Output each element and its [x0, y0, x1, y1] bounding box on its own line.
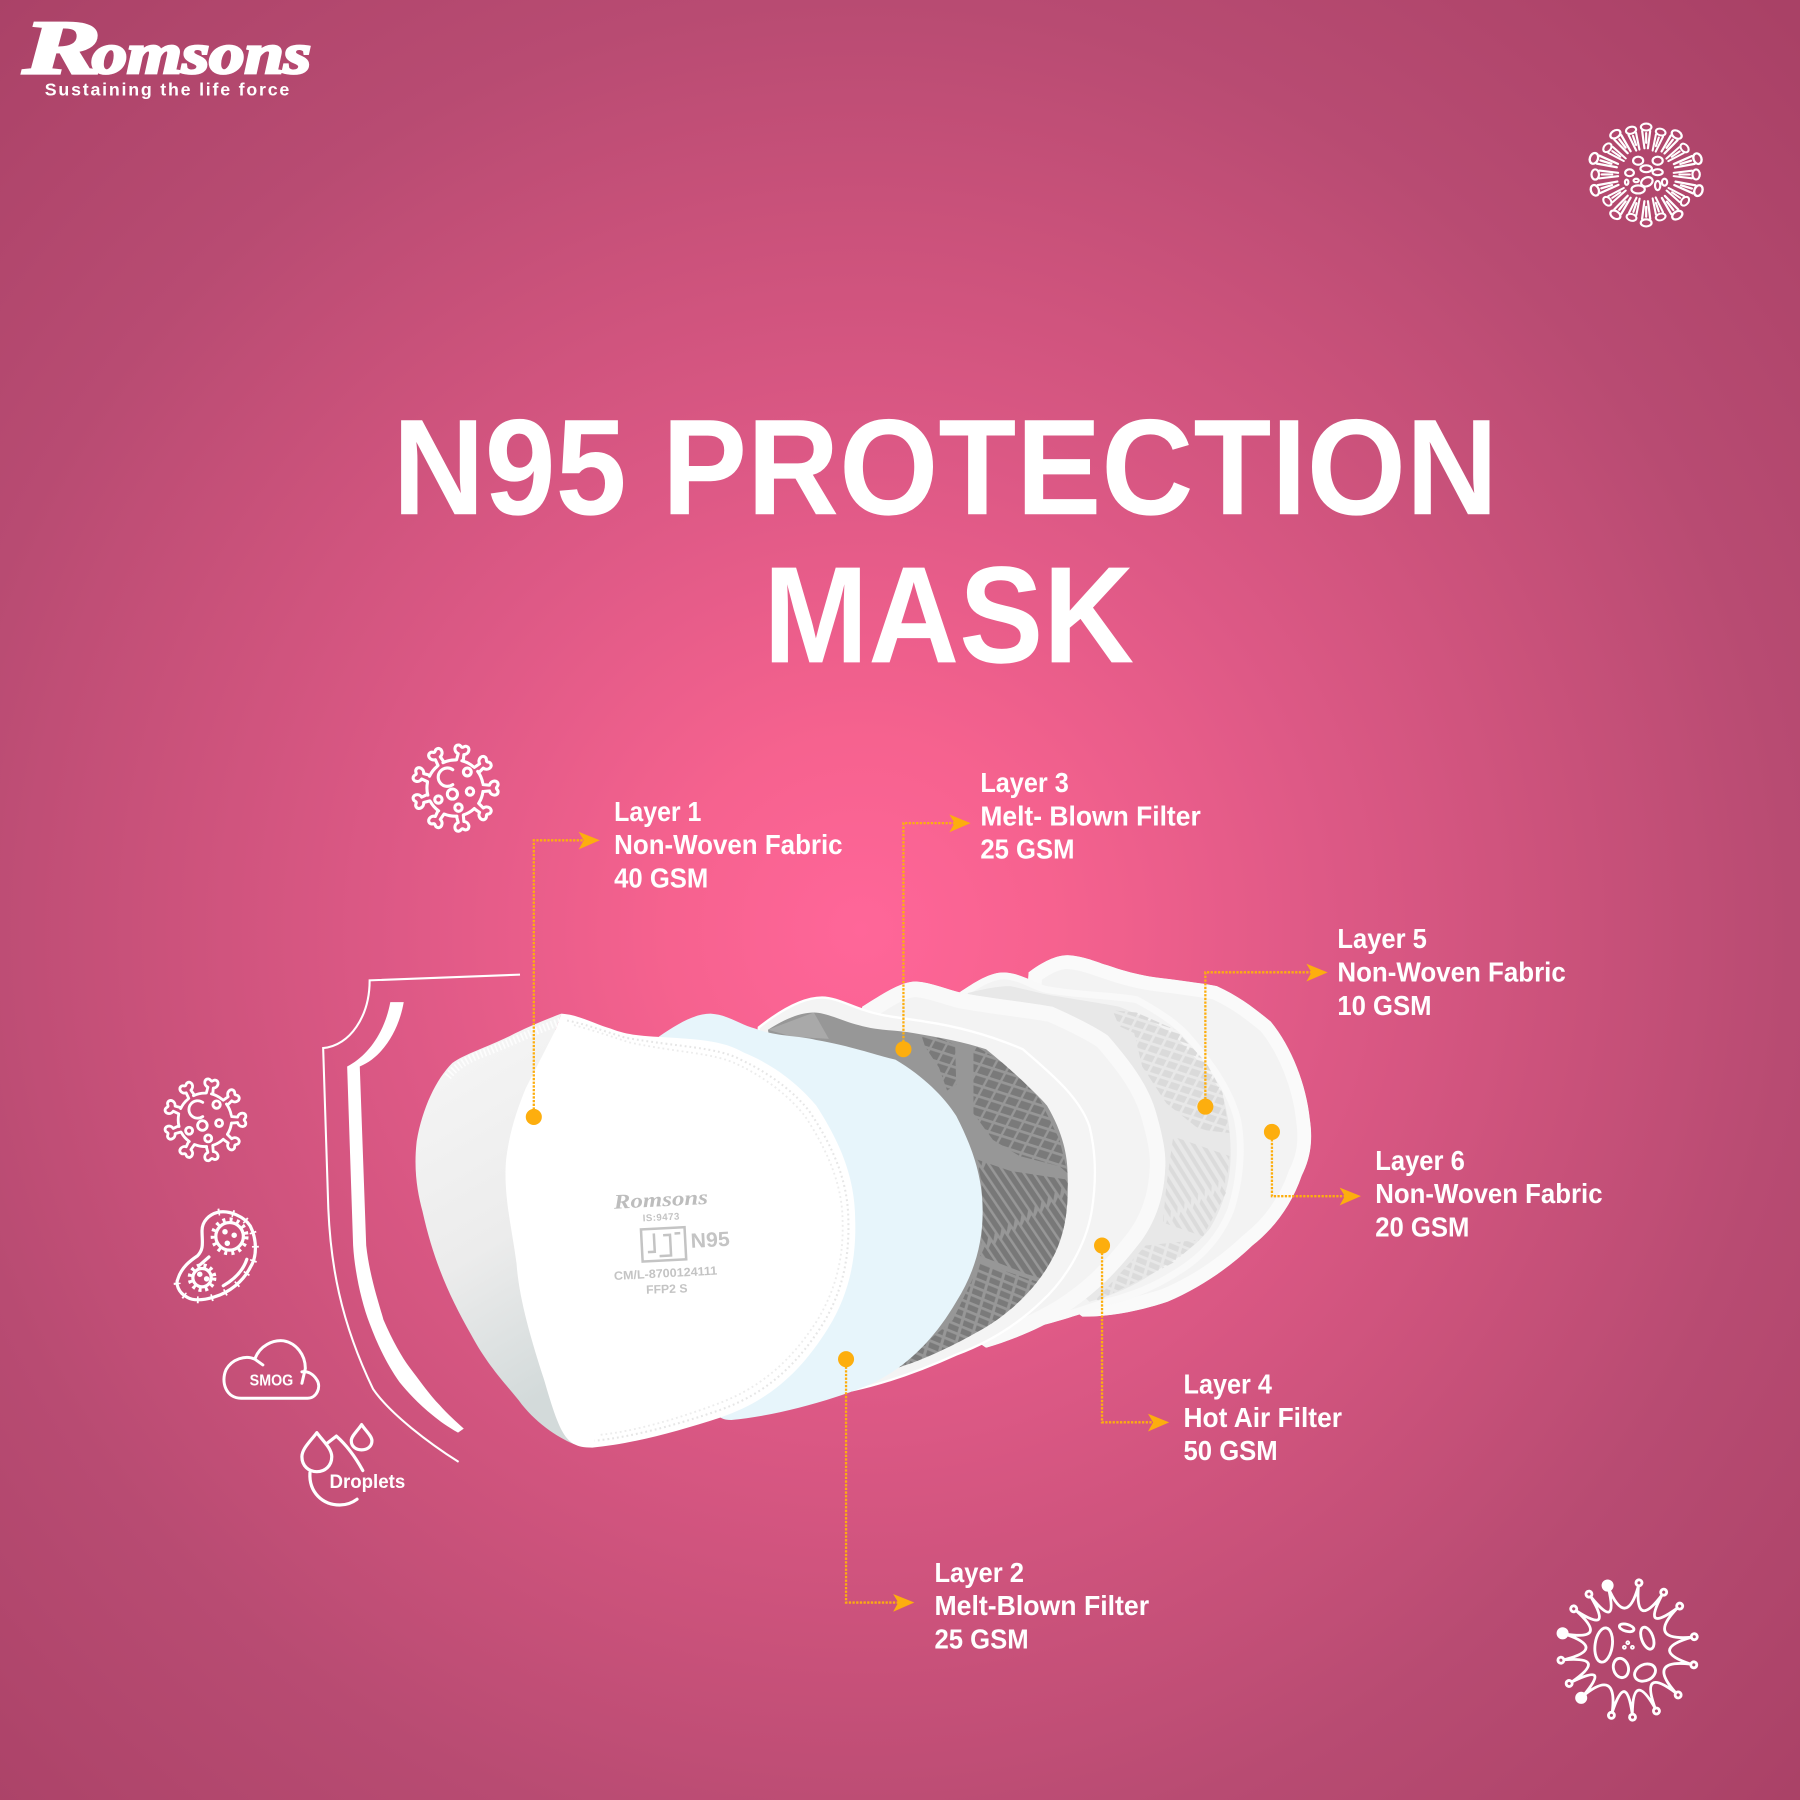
layer 2 text: Layer 2 [934, 1557, 1024, 1588]
thin contour [323, 975, 520, 1462]
droplets label: Droplets [329, 1472, 405, 1493]
layer 3 text: 25 GSM [980, 834, 1074, 865]
icon: virus near layer 1 [412, 744, 498, 832]
layer 6 text: 20 GSM [1375, 1211, 1469, 1242]
licence number: CM/L-8700124111 [614, 1264, 718, 1283]
title [393, 390, 1498, 692]
mask layer 4 [861, 982, 1165, 1348]
layer 1 text: Layer 1 [614, 796, 701, 827]
cloud outline [224, 1341, 319, 1398]
layer 6 text: Non-Woven Fabric [1375, 1178, 1603, 1209]
icon: virus left [164, 1078, 246, 1161]
layer 6 leader [1264, 1124, 1361, 1205]
callout: layer 4 [1094, 1238, 1342, 1466]
layer 5 text [1337, 923, 1566, 1021]
printed brand: Romsons [612, 1187, 708, 1214]
FFP2 class: FFP2 S [646, 1281, 688, 1297]
layer 1 leader [526, 832, 600, 1125]
layer 2 text [934, 1557, 1149, 1654]
layer 4 text [1184, 1369, 1342, 1466]
layer 4 text: 50 GSM [1184, 1435, 1278, 1466]
layer 3 text: Melt- Blown Filter [980, 800, 1201, 831]
layer 5 text: Non-Woven Fabric [1337, 957, 1566, 988]
layer 5 leader [1197, 964, 1328, 1115]
layer 2 text: 25 GSM [934, 1623, 1029, 1654]
layer 3 text: Layer 3 [980, 767, 1069, 798]
layer 3 text [980, 767, 1201, 865]
layer 1 text [614, 796, 843, 893]
icon: smog cloud [224, 1341, 319, 1398]
standard code: IS:9473 [642, 1211, 680, 1224]
side wing [416, 1014, 597, 1444]
layer 6 text [1375, 1145, 1603, 1242]
layer 4 text: Layer 4 [1184, 1369, 1273, 1400]
callout: layer 6 [1264, 1124, 1603, 1242]
callout: layer 1 [526, 796, 843, 1125]
layer 5 text: 10 GSM [1337, 990, 1432, 1021]
icon: spiked virus bottom right [1557, 1579, 1698, 1720]
brand wordmark: omsons [92, 23, 311, 86]
logo: Romsons [21, 6, 311, 99]
title line 2: MASK [763, 538, 1134, 692]
callout: layer 2 [838, 1351, 1149, 1654]
thick contour [347, 1002, 464, 1433]
layer 1 text: Non-Woven Fabric [614, 829, 843, 860]
printed mask marks [612, 1187, 730, 1297]
layer 4 text: Hot Air Filter [1184, 1402, 1342, 1433]
title line 1: N95 PROTECTION [393, 390, 1498, 543]
layer 6 text: Layer 6 [1375, 1145, 1465, 1176]
icon: detailed virus top right [1588, 124, 1704, 226]
icon: droplets [302, 1425, 405, 1505]
exploded mask layers [416, 955, 1311, 1448]
layer 2 text: Melt-Blown Filter [934, 1590, 1149, 1621]
layer 3 leader [895, 814, 971, 1057]
ISI mark [641, 1227, 686, 1262]
face contour lines [323, 975, 520, 1462]
layer 5 mesh [968, 986, 1231, 1302]
smog label: SMOG [250, 1372, 293, 1390]
mask layer 3 [746, 998, 1095, 1390]
layer 2 leader [838, 1351, 914, 1612]
front panel [505, 1014, 855, 1448]
stitched seam [567, 1021, 848, 1441]
mask layer 5 [960, 972, 1230, 1325]
mask layer 2 [659, 1014, 983, 1420]
N95 mark: N95 [690, 1228, 730, 1253]
mask layer 6 [1010, 955, 1311, 1317]
callout: layer 5 [1197, 923, 1566, 1115]
callout: layer 3 [895, 767, 1201, 1057]
tagline: Sustaining the life force [45, 79, 289, 99]
droplet shapes [302, 1425, 372, 1505]
layer 1 text: 40 GSM [614, 862, 708, 893]
mask layer 1 [416, 1014, 855, 1448]
layer 3 grey filter [768, 1012, 1068, 1368]
layer 5 text: Layer 5 [1337, 923, 1427, 954]
layer 4 leader [1094, 1238, 1169, 1432]
brand wordmark: R [21, 6, 101, 90]
icon: bacteria [177, 1212, 255, 1300]
